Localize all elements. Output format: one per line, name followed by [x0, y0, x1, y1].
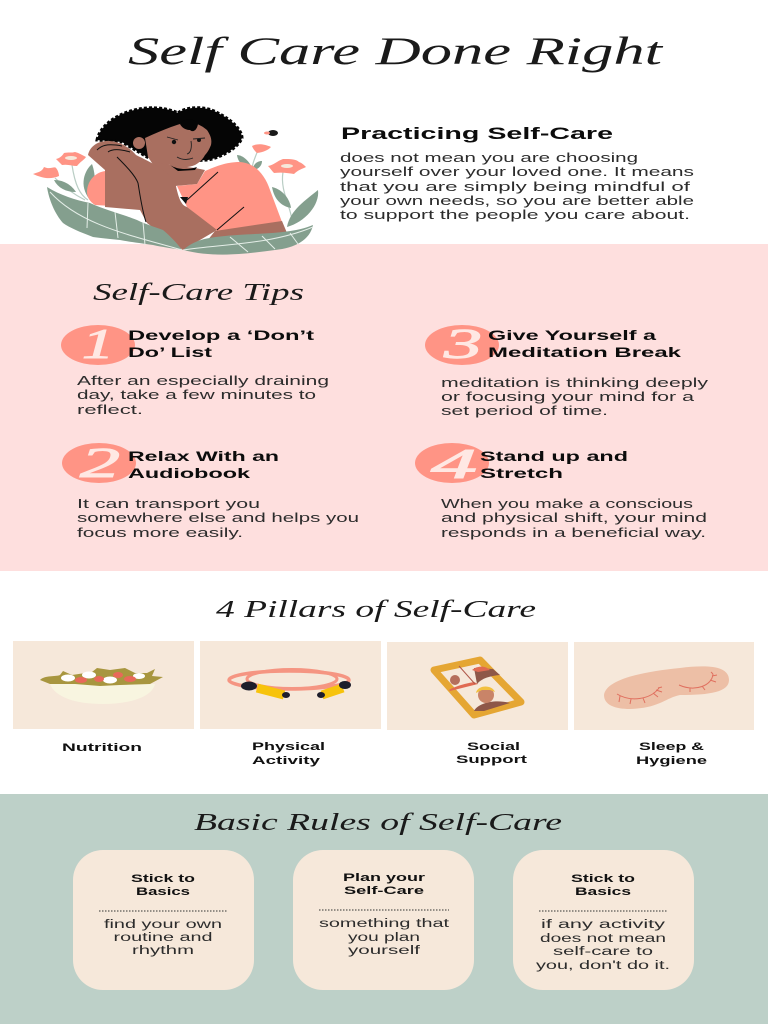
rule card 1: rhythm [132, 945, 194, 957]
intro heading: Practicing Self-Care [341, 125, 613, 143]
face [133, 119, 211, 167]
rule card 3: does not mean [540, 933, 666, 945]
panel: tips background [0, 244, 768, 571]
tip 4 [415, 442, 707, 540]
rule card 3: self-care to [553, 946, 653, 958]
tip 4: When you make a conscious [441, 497, 693, 511]
tip 1: 1 [82, 322, 114, 368]
pillar: nutrition [13, 641, 194, 729]
tip 1: day, take a few minutes to [77, 388, 316, 402]
label: physical activity: Physical [252, 741, 325, 753]
tip 1: reflect. [77, 403, 143, 417]
intro text: that you are simply being mindful of [340, 180, 691, 194]
label: nutrition: Nutrition [62, 742, 142, 754]
small leaves [54, 155, 318, 227]
intro text: to support the people you care about. [340, 208, 690, 222]
label: social support [456, 741, 528, 766]
label: physical activity: Activity [252, 755, 321, 767]
tip 2 [62, 441, 359, 540]
label: sleep and hygiene [636, 741, 707, 767]
rule card 3: if any activity [541, 919, 665, 931]
rule card 1: Basics [136, 886, 190, 898]
tip 4: 4 [431, 442, 477, 488]
tip 2: focus more easily. [77, 526, 243, 540]
pillars heading: 4 Pillars of Self-Care [216, 597, 537, 623]
label: social support: Support [456, 754, 528, 766]
tip 3 [425, 322, 709, 418]
rule card 2: Plan your [343, 872, 426, 884]
tips heading: Self-Care Tips [93, 280, 304, 306]
intro text: does not mean you are choosing [340, 151, 638, 165]
tip 3: 3 [442, 322, 482, 368]
label: sleep and hygiene: Hygiene [636, 755, 707, 767]
arms [88, 141, 217, 250]
pillar: sleep and hygiene [574, 642, 754, 730]
pillar: physical activity [200, 641, 381, 729]
rule card 2: you plan [348, 932, 420, 944]
rule card 1 [73, 850, 254, 990]
stems [55, 150, 292, 220]
tip 3: Meditation Break [488, 344, 681, 360]
rule card 1: routine and [114, 932, 212, 944]
rules heading: Basic Rules of Self-Care [194, 810, 563, 836]
tip 1 [61, 322, 329, 417]
icon: salad bowl [40, 668, 163, 704]
tip 4: Stretch [480, 465, 563, 481]
tip 2: somewhere else and helps you [77, 511, 359, 525]
tip 3: or focusing your mind for a [441, 390, 694, 404]
rule card 1: Stick to [131, 873, 195, 885]
rule card 2: Self-Care [344, 885, 424, 897]
rule card 3: Stick to [571, 873, 635, 885]
arm lines [97, 145, 244, 230]
intro text: your own needs, so you are better able [340, 194, 694, 208]
icon: jump rope [229, 670, 351, 698]
label: sleep and hygiene: Sleep & [639, 741, 704, 753]
rule card 3 [513, 850, 694, 990]
left large leaf [47, 187, 182, 250]
bee [264, 130, 278, 136]
rule card 2: yourself [348, 945, 421, 957]
label: social support: Social [467, 741, 520, 753]
tip 2: It can transport you [77, 497, 260, 511]
tip 3: Give Yourself a [488, 327, 656, 343]
tip 4: Stand up and [480, 448, 628, 464]
tip 3: meditation is thinking deeply [441, 376, 709, 390]
illustration: woman among leaves [33, 108, 318, 255]
pillar: social support [387, 642, 568, 730]
body [177, 162, 282, 232]
rule card 3: you, don't do it. [536, 960, 670, 972]
panel: basic rules background [0, 794, 768, 1024]
chin shadow [170, 165, 197, 171]
tip 1: Develop a ‘Don’t [128, 327, 315, 343]
icon: sleep mask [604, 666, 729, 709]
neck [148, 157, 205, 186]
label: physical activity [252, 741, 325, 767]
hair [97, 108, 242, 162]
tip 1: Do’ List [128, 344, 213, 360]
rule card 2 [293, 850, 474, 990]
flowers [33, 144, 306, 178]
shirt detail [180, 197, 188, 204]
waist band [207, 221, 287, 241]
intro text: yourself over your loved one. It means [340, 165, 694, 179]
tip 2: Audiobook [128, 465, 250, 481]
far shoulder [87, 171, 112, 206]
right large leaf [183, 225, 313, 255]
tip 4: and physical shift, your mind [441, 511, 707, 525]
icon: phone video call [434, 660, 521, 715]
tip 3: set period of time. [441, 404, 608, 418]
tip 4: responds in a beneficial way. [441, 526, 706, 540]
tip 2: 2 [80, 441, 120, 487]
title: Self Care Done Right [128, 30, 664, 73]
tip 2: Relax With an [128, 448, 279, 464]
tip 1: After an especially draining [77, 374, 329, 388]
rule card 1: find your own [104, 919, 222, 931]
rule card 2: something that [319, 918, 450, 930]
rule card 3: Basics [575, 886, 631, 898]
intro text [340, 151, 694, 222]
